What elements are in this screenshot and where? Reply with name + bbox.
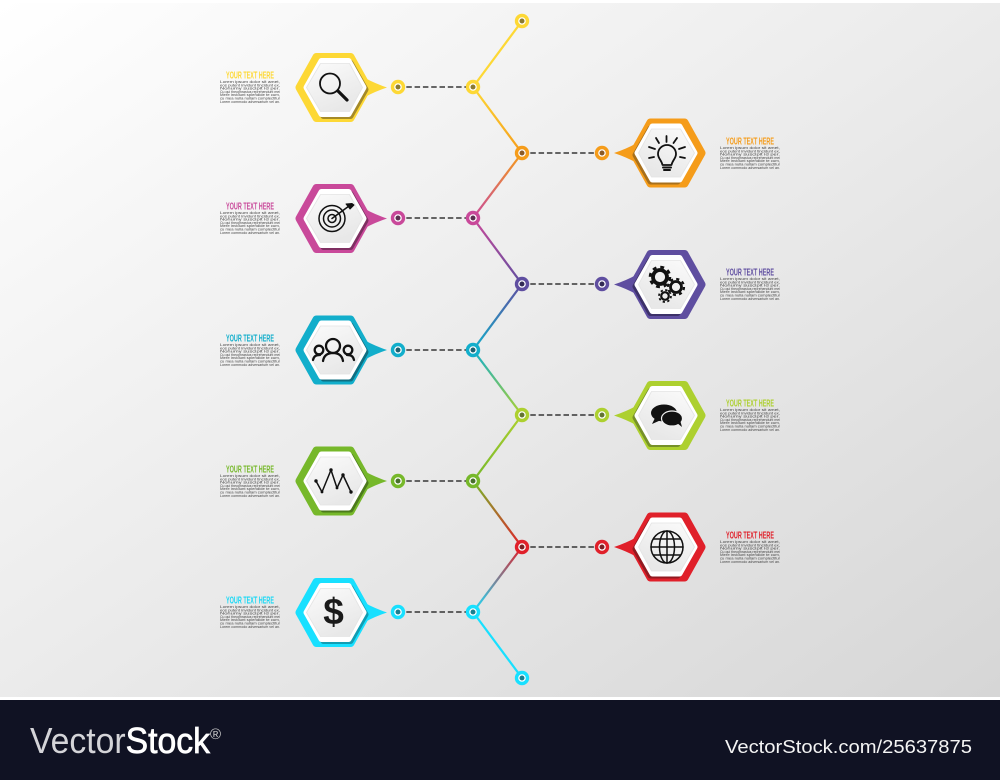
text block: cyan: cu mea nulla nullam complectitur	[220, 622, 281, 626]
text block: blue: cu mea nulla nullam complectitur	[220, 360, 281, 364]
text block: purple: cu mea nulla nullam complectitur	[720, 294, 781, 298]
text block: magenta: Nonumy suscipit id per.	[220, 218, 280, 222]
text block: orange: Nonumy suscipit id per.	[720, 153, 780, 157]
text block: cyan: Nonumy suscipit id per.	[220, 612, 280, 616]
text block: red: YOUR TEXT HERE	[726, 530, 774, 542]
text block: blue: eos putent invidunt tincidunt ex,	[220, 346, 280, 350]
text block: blue	[220, 334, 281, 367]
text block: yellow	[220, 70, 281, 104]
text block: blue: Lorem ipsum dolor sit amet,	[220, 343, 280, 347]
footer bar	[0, 700, 1000, 780]
text block: purple: YOUR TEXT HERE	[726, 268, 774, 278]
text block: green: Cu qui theophrastus reprehendunt mei	[220, 484, 280, 488]
text block: lime: YOUR TEXT HERE	[726, 398, 774, 410]
text block: green: Mere invidunt splendide te cum,	[220, 487, 280, 491]
text block: purple: Lorem ipsum dolor sit amet,	[720, 277, 780, 281]
text block: green: eos putent invidunt tincidunt ex,	[220, 477, 280, 481]
icon: gears	[650, 267, 684, 302]
text block: red: Lorem commodo adversarium vel an.	[720, 560, 780, 564]
text block: yellow: Mere invidunt splendide te cum,	[220, 93, 280, 97]
icon: globe	[651, 531, 683, 563]
text block: orange: eos putent invidunt tincidunt ex,	[720, 149, 780, 153]
text block: orange: Lorem commodo adversarium vel an.	[720, 166, 780, 170]
text block: yellow: Lorem ipsum dolor sit amet,	[220, 80, 280, 84]
text block: green: Lorem ipsum dolor sit amet,	[220, 474, 280, 478]
footer image id: VectorStock.com/25637875	[725, 736, 972, 757]
text block: magenta	[220, 202, 281, 235]
hexagon badge: lime	[614, 385, 702, 446]
text block: green: Nonumy suscipit id per.	[220, 481, 280, 485]
text block: green: YOUR TEXT HERE	[226, 464, 274, 476]
text block: green	[220, 464, 281, 498]
text block: lime: Mere invidunt splendide te cum,	[720, 421, 780, 425]
text block: yellow: Lorem commodo adversarium vel an.	[220, 100, 280, 104]
text block: lime: Cu qui theophrastus reprehendunt mei	[720, 418, 780, 422]
text block: cyan: Lorem commodo adversarium vel an.	[220, 625, 280, 629]
icon: light bulb	[649, 136, 685, 170]
text block: orange: cu mea nulla nullam complectitur	[720, 162, 781, 166]
icon: line chart	[314, 468, 353, 494]
text block: orange: YOUR TEXT HERE	[726, 136, 774, 148]
text block: red: eos putent invidunt tincidunt ex,	[720, 543, 780, 547]
icon: group of people	[313, 339, 354, 361]
text block: magenta: cu mea nulla nullam complectitur	[220, 228, 281, 232]
text block: orange: Cu qui theophrastus reprehendunt mei	[720, 156, 780, 160]
icon: chat bubbles	[651, 404, 682, 427]
text block: purple: eos putent invidunt tincidunt ex,	[720, 280, 780, 284]
footer logo: VectorStock	[30, 720, 211, 761]
text block: blue: YOUR TEXT HERE	[226, 334, 274, 344]
text block: purple	[720, 268, 781, 301]
text block: blue: Cu qui theophrastus reprehendunt mei	[220, 353, 280, 357]
text block: purple: Cu qui theophrastus reprehendunt mei	[720, 287, 780, 291]
text block: purple: Lorem commodo adversarium vel an.	[720, 297, 780, 301]
text block: cyan	[220, 596, 281, 629]
text block: yellow: eos putent invidunt tincidunt ex,	[220, 83, 280, 87]
text block: cyan: Cu qui theophrastus reprehendunt mei	[220, 615, 280, 619]
text block: blue: Mere invidunt splendide te cum,	[220, 356, 280, 360]
text block: yellow: Nonumy suscipit id per.	[220, 87, 280, 91]
icon: magnifying glass	[320, 74, 347, 100]
text block: cyan: YOUR TEXT HERE	[226, 596, 274, 606]
text block: orange	[720, 136, 781, 170]
text block: red: Lorem ipsum dolor sit amet,	[720, 540, 780, 544]
text block: magenta: Cu qui theophrastus reprehendunt mei	[220, 221, 280, 225]
text block: magenta: YOUR TEXT HERE	[226, 202, 274, 212]
text block: green: Lorem commodo adversarium vel an.	[220, 494, 280, 498]
hexagon badge: blue	[300, 320, 387, 380]
text block: lime: cu mea nulla nullam complectitur	[720, 424, 781, 428]
text block: yellow: YOUR TEXT HERE	[226, 70, 274, 82]
text block: cyan: eos putent invidunt tincidunt ex,	[220, 608, 280, 612]
text block: red	[720, 530, 781, 564]
text block: cyan: Mere invidunt splendide te cum,	[220, 618, 280, 622]
text block: lime	[720, 398, 781, 432]
text block: orange: Mere invidunt splendide te cum,	[720, 159, 780, 163]
text block: magenta: Mere invidunt splendide te cum,	[220, 224, 280, 228]
text block: yellow: cu mea nulla nullam complectitur	[220, 96, 281, 100]
hexagon badge: magenta	[300, 188, 387, 249]
text block: red: Cu qui theophrastus reprehendunt mei	[720, 550, 780, 554]
hexagon badge: cyan	[300, 582, 387, 643]
hexagon badge: yellow	[300, 57, 387, 118]
hexagon badge: red	[614, 516, 702, 578]
hexagon badge: orange	[614, 122, 702, 184]
text block: purple: Nonumy suscipit id per.	[720, 284, 780, 288]
registered mark: ®	[210, 726, 221, 743]
text block: cyan: Lorem ipsum dolor sit amet,	[220, 605, 280, 609]
text block: lime: Lorem commodo adversarium vel an.	[720, 428, 780, 432]
icon: dollar sign: $	[323, 591, 344, 632]
timeline zigzag lines	[473, 21, 522, 678]
dashed connectors	[398, 87, 602, 612]
text block: lime: Lorem ipsum dolor sit amet,	[720, 408, 780, 412]
text block: blue: Nonumy suscipit id per.	[220, 350, 280, 354]
text block: green: cu mea nulla nullam complectitur	[220, 490, 281, 494]
text block: yellow: Cu qui theophrastus reprehendunt mei	[220, 90, 280, 94]
hexagon badge: purple	[614, 254, 702, 315]
text block: red: Nonumy suscipit id per.	[720, 547, 780, 551]
hexagon badge: green	[300, 450, 387, 512]
text block: lime: eos putent invidunt tincidunt ex,	[720, 411, 780, 415]
text block: magenta: Lorem ipsum dolor sit amet,	[220, 211, 280, 215]
text block: lime: Nonumy suscipit id per.	[720, 415, 780, 419]
timeline nodes	[392, 16, 608, 684]
text block: magenta: eos putent invidunt tincidunt ex,	[220, 214, 280, 218]
text block: blue: Lorem commodo adversarium vel an.	[220, 363, 280, 367]
icon: target with arrow	[319, 204, 354, 232]
text block: orange: Lorem ipsum dolor sit amet,	[720, 146, 780, 150]
text block: red: cu mea nulla nullam complectitur	[720, 556, 781, 560]
text block: magenta: Lorem commodo adversarium vel an.	[220, 231, 280, 235]
text block: red: Mere invidunt splendide te cum,	[720, 553, 780, 557]
text block: purple: Mere invidunt splendide te cum,	[720, 290, 780, 294]
